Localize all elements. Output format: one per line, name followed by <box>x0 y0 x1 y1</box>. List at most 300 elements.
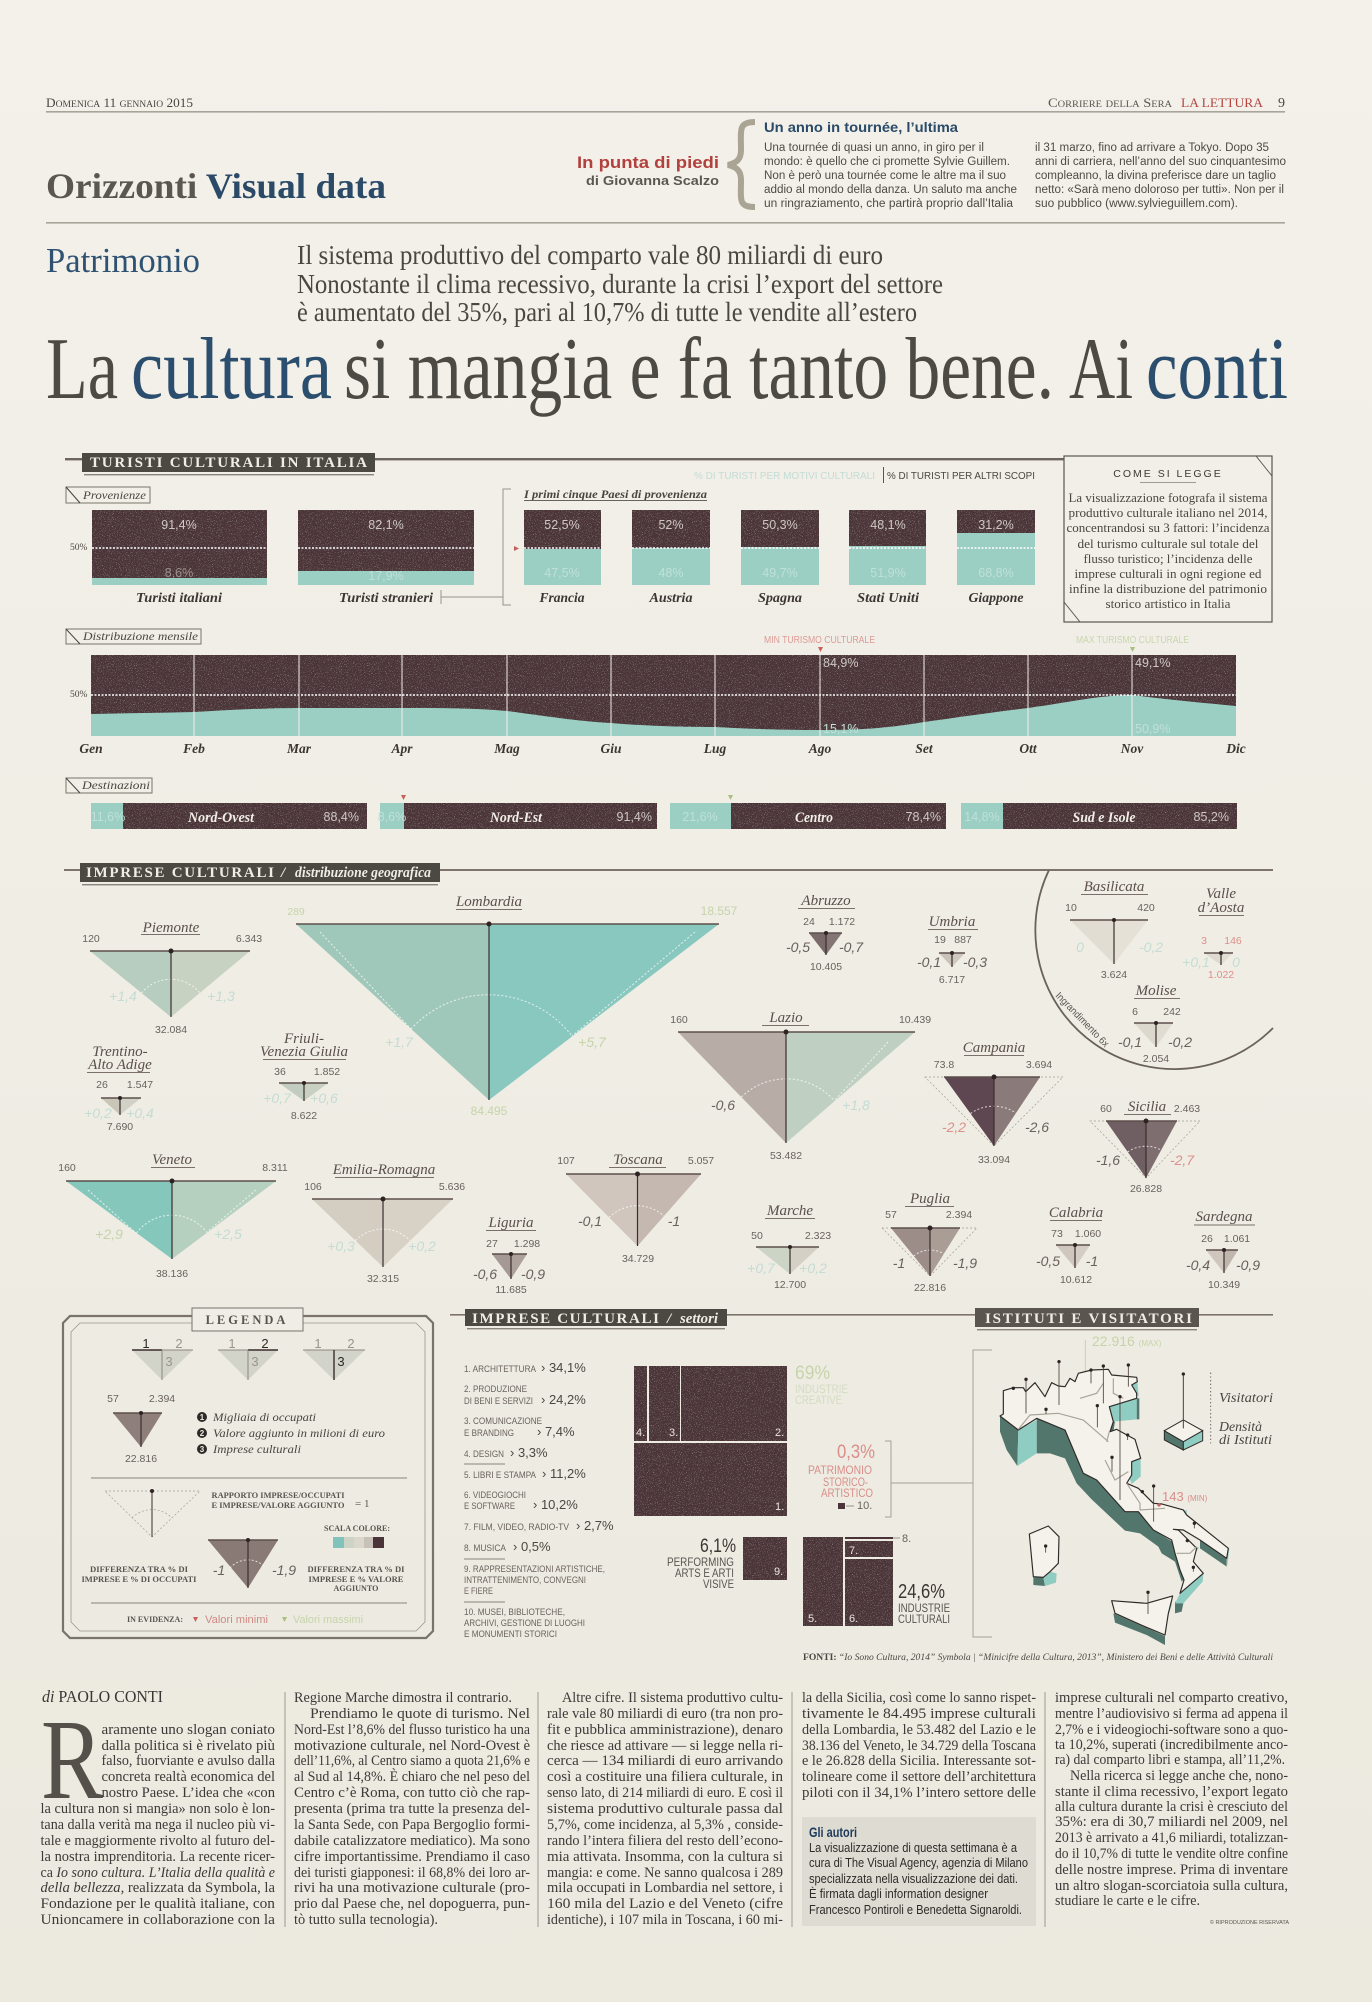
title box: LEGENDA <box>206 1313 288 1327</box>
region: Trentino-Alto Adige: 7.690 <box>107 1121 133 1133</box>
text column 3: sistema produttivo culturale passa dal <box>547 1801 783 1817</box>
callout: 6,1 percent: PERFORMING <box>667 1555 734 1569</box>
region: Valle d'Aosta <box>1182 886 1244 981</box>
marker: max destination <box>728 795 733 800</box>
text column 3: che riesce ad attivare — si legge nella ri- <box>547 1738 783 1754</box>
region: Sicilia: 60 <box>1100 1103 1112 1115</box>
marker: min destination <box>401 795 406 800</box>
region: Campania: 33.094 <box>978 1154 1010 1166</box>
mini triangle: valore 2 <box>218 1336 278 1380</box>
bar: Austria: 48% <box>658 566 684 580</box>
text column 4: tivamente le 84.495 imprese culturali <box>802 1706 1036 1722</box>
region: Veneto: Veneto <box>152 1152 192 1168</box>
text column 1: dalla politica si è rivelato più <box>102 1738 275 1754</box>
region: Veneto <box>58 1152 288 1280</box>
list of sectors: E SOFTWARE <box>464 1501 515 1512</box>
bar: Sud e Isole: 85,2% <box>1194 810 1229 824</box>
text column 3: mila occupati in Lombardia nel settore, i <box>547 1880 783 1896</box>
region: Molise: -0,2 <box>1168 1034 1192 1050</box>
article text: suo pubblico (www.sylvieguillem.com). <box>1035 198 1238 210</box>
text column 4: tolineare come il settore dell’architettura <box>802 1769 1036 1785</box>
text column 3: fit e pubblica amministrazione), denaro <box>547 1722 783 1738</box>
region: Veneto: +2,5 <box>214 1226 242 1242</box>
list of sectors: 1. ARCHITETTURA <box>464 1364 537 1375</box>
list of sectors: › 10,2% <box>533 1497 578 1512</box>
key: triangle values: Valore aggiunto in milioni di euro <box>213 1426 385 1440</box>
region: Basilicata: Basilicata <box>1084 879 1144 895</box>
explanation text: flusso turistico; l’incidenza delle <box>1084 552 1253 566</box>
list of sectors: 9. RAPPRESENTAZIONI ARTISTICHE, <box>464 1564 605 1575</box>
region: Sicilia: 2.463 <box>1174 1103 1200 1115</box>
text column 3: rando l’intera filiera del resto dell’econo- <box>547 1833 783 1849</box>
callout: 0,3 percent: 10. <box>857 1500 872 1512</box>
region: Valle d'Aosta: d’Aosta <box>1198 900 1244 916</box>
article text: anni di carriera, nell’anno del suo cinquantesimo <box>1035 156 1286 168</box>
text column 3: mangia: e come. Ne sanno qualcosa i 289 <box>547 1865 783 1881</box>
month labels: Lug <box>703 741 726 756</box>
box: gli autori: cura di The Visual Agency, agenzia di Milano <box>809 1855 1028 1870</box>
map: Sardinia <box>1029 1526 1059 1577</box>
callout: 0,3 percent <box>808 1442 875 1512</box>
area chart: monthly distribution: 84,9% <box>823 656 858 670</box>
map of Italy <box>1000 1340 1229 1645</box>
region: Sardegna: -0,9 <box>1236 1257 1260 1273</box>
region: Emilia-Romagna: 106 <box>304 1181 322 1193</box>
region: Toscana: 5.057 <box>688 1155 714 1167</box>
region: Sicilia: -1,6 <box>1096 1152 1120 1168</box>
callout: 24,6 percent: 24,6% <box>898 1581 945 1603</box>
text column 4: e le 26.828 della Sicilia. Interessante sot- <box>802 1753 1036 1769</box>
main title: conti <box>1146 321 1288 418</box>
region: Campania: Campania <box>963 1040 1025 1056</box>
region: Liguria: Liguria <box>487 1215 534 1231</box>
text column 5: ta 10,2%, superati (incredibilmente anco- <box>1055 1737 1288 1753</box>
connector to top five countries <box>441 489 511 605</box>
text column 5: 35%: era di 30,7 miliardi nel 2009, nel <box>1055 1814 1288 1830</box>
region: Abruzzo <box>786 893 864 973</box>
main title: Ai <box>1069 321 1133 418</box>
note: right difference: DIFFERENZA TRA % DI <box>308 1564 405 1574</box>
banner: turisti culturali in Italia <box>65 453 1065 475</box>
icon: key block <box>1164 1372 1211 1450</box>
banner: imprese culturali distribuzione geografica: distribuzione geografica <box>295 865 431 881</box>
example triangle: Puglia <box>107 1393 175 1465</box>
callout: 0,3 percent: ARTISTICO <box>821 1486 873 1500</box>
region: Calabria: -1 <box>1086 1253 1098 1269</box>
article text: mondo: è quello che ci promette Sylvie Guillem. <box>764 156 1010 168</box>
text column 2: Centro c’è Roma, con tutto ciò che rap- <box>294 1785 530 1801</box>
region: Puglia: -1 <box>893 1255 905 1271</box>
box: gli autori: specializzata nella visualizzazione dei dati. <box>809 1871 1018 1886</box>
region: Basilicata: 3.624 <box>1101 969 1127 981</box>
banner: istituti e visitatori <box>967 1308 1273 1330</box>
callout: 69 percent: CREATIVE <box>795 1393 842 1407</box>
text column 1: Unioncamere in collaborazione con la <box>40 1912 275 1928</box>
list of sectors: INTRATTENIMENTO, CONVEGNI <box>464 1575 586 1586</box>
callout: 69 percent: 69% <box>795 1363 830 1384</box>
subheading: Il sistema produttivo del comparto vale 80 miliardi di euro <box>297 240 883 270</box>
bar: Nord-Est: Nord-Est <box>489 810 543 826</box>
example triangle: differences: -1,9 <box>272 1562 296 1578</box>
panel: come si legge <box>1064 456 1272 622</box>
bar: Francia: 52,5% <box>544 518 580 532</box>
callout: 69 percent: INDUSTRIE <box>795 1382 848 1396</box>
panel: legenda <box>63 1308 433 1638</box>
region: Puglia: 2.394 <box>946 1209 972 1221</box>
region: Emilia-Romagna: 5.636 <box>439 1181 465 1193</box>
note: right difference: IMPRESE E % VALORE <box>308 1574 404 1584</box>
column dividers <box>285 1692 1045 1927</box>
box: gli autori: La visualizzazione di questa settimana è a <box>809 1840 1018 1855</box>
callout: max cultural tourism <box>1076 635 1189 652</box>
treemap: industrie culturali: 7. <box>849 1545 858 1557</box>
article text: addio al mondo della danza. Un saluto ma anche <box>764 184 1017 196</box>
region: Campania: -2,2 <box>942 1119 966 1135</box>
region: Abruzzo: Abruzzo <box>800 893 851 909</box>
region: Trentino-Alto Adige: Alto Adige <box>87 1057 152 1073</box>
region: Emilia-Romagna: +0,2 <box>408 1238 436 1254</box>
region: Abruzzo: -0,7 <box>839 939 864 955</box>
text column 2: presenta (prima tra tutte la presenza del- <box>294 1801 530 1817</box>
text column 3: 160 mila del Lazio e del Veneto (cifre <box>547 1896 783 1912</box>
region: Abruzzo: 1.172 <box>829 916 855 928</box>
mini triangle: valore 1: 3 <box>165 1354 173 1369</box>
bar: Nord-Ovest <box>91 803 367 829</box>
treemap: industrie creative: 2. <box>775 1427 784 1439</box>
text column 5: do il 10,7% di tutte le vendite oltre confine <box>1055 1846 1288 1862</box>
region: Piemonte: +1,4 <box>109 988 137 1004</box>
text column 2: al Sud al 14,8%. È chiaro che nel peso del <box>294 1768 530 1785</box>
text column 5: mentre l’audiovisivo si ferma ad appena il <box>1055 1706 1288 1722</box>
month labels: Dic <box>1225 741 1246 756</box>
region: Basilicata <box>1065 879 1163 981</box>
drop cap: R <box>41 1696 103 1823</box>
region: Toscana: 107 <box>557 1155 575 1167</box>
bar: turisti italiani: 91,4% <box>161 518 197 532</box>
area chart: monthly distribution: 15,1% <box>823 722 858 736</box>
callout: 143 min: 143 (MIN) <box>1162 1489 1208 1504</box>
text column 5: ra) dal comparto libri e stampa, all’11,2%. <box>1055 1752 1285 1768</box>
text column 1: della bellezza, realizzata da Symbola, la <box>40 1880 275 1896</box>
map key: visitatori e densita <box>1164 1372 1273 1450</box>
bar: Francia <box>524 510 601 606</box>
callout: 6,1 percent: 6,1% <box>700 1536 736 1557</box>
text column 2: rivi ha una motivazione culturale (pro- <box>294 1880 530 1896</box>
bar: Austria: 52% <box>658 518 684 532</box>
key: triangle values: 1 <box>200 1413 205 1422</box>
explanation text: infine la distribuzione del patrimonio <box>1069 582 1267 596</box>
text column 3: Altre cifre. Il sistema produttivo cultu- <box>562 1690 783 1706</box>
highlight key <box>127 1614 363 1626</box>
bar: Austria: Austria <box>648 591 692 606</box>
month labels: Mar <box>286 741 312 756</box>
ratio text <box>212 1490 369 1510</box>
text column 5: imprese culturali nel comparto creativo, <box>1055 1690 1288 1706</box>
treemap: industrie creative: 3. <box>669 1427 678 1439</box>
text column 5: 2,7% e i videogiochi-software sono a quo- <box>1055 1722 1288 1738</box>
note: right difference <box>308 1564 405 1593</box>
text column 3: cerca — 134 miliardi di euro arrivando <box>547 1753 783 1769</box>
region: Basilicata: -0,2 <box>1139 939 1163 955</box>
list of sectors: E MONUMENTI STORICI <box>464 1629 557 1640</box>
region: Umbria: Umbria <box>929 914 975 930</box>
region: Veneto: 38.136 <box>156 1268 188 1280</box>
region: Valle d'Aosta: Valle <box>1206 886 1236 902</box>
bar: Centro: Centro <box>795 810 833 826</box>
highlight key: Valori minimi <box>205 1614 268 1626</box>
text column 4 <box>802 1690 1036 1801</box>
page number: 9 <box>1278 96 1285 111</box>
label: provenienze: Provenienze <box>82 488 147 502</box>
newspaper name: Corriere della Sera <box>1048 96 1173 110</box>
article text: netto: «Sarà meno doloroso per tutti». Non per il <box>1035 184 1284 196</box>
region: Trentino-Alto Adige: 26 <box>96 1079 108 1091</box>
list of sectors: 6. VIDEOGIOCHI <box>464 1490 526 1501</box>
kicker: Patrimonio: Patrimonio <box>46 241 200 280</box>
region: Abruzzo: -0,5 <box>786 939 810 955</box>
mini triangle: valore 2: 1 <box>228 1336 236 1351</box>
region: Sardegna: Sardegna <box>1196 1209 1252 1225</box>
text column 5: 2013 è arrivato a 41,6 miliardi, totalizzan- <box>1055 1830 1288 1846</box>
region: Calabria: 73 <box>1051 1228 1063 1240</box>
bar: Spagna <box>741 510 819 606</box>
region: Sicilia <box>1090 1099 1200 1195</box>
region: Valle d'Aosta: 3 <box>1201 935 1207 947</box>
text column 2: Prendiamo le quote di turismo. Nel <box>310 1706 530 1722</box>
region: Lombardia: 84.495 <box>471 1104 508 1118</box>
bar: Francia: Francia <box>539 591 584 606</box>
region: Sicilia: Sicilia <box>1128 1099 1166 1115</box>
region: Sardegna: 1.061 <box>1224 1233 1250 1245</box>
region: Friuli-Venezia Giulia: Venezia Giulia <box>260 1044 348 1060</box>
subheading: è aumentato del 35%, pari al 10,7% di tutte le vendite all’estero <box>297 297 917 327</box>
list of sectors: › 34,1% <box>541 1360 586 1375</box>
map: dark side faces <box>1000 1391 1227 1645</box>
sources: FONTI: “Io Sono Cultura, 2014” Symbola | “Minicifre della Cultura, 2013”, Ministero dei Beni e delle Attività Culturali <box>803 1652 1273 1663</box>
bar: Austria <box>632 510 710 606</box>
region: Molise: 6 <box>1132 1006 1138 1018</box>
text column 2: Regione Marche dimostra il contrario. <box>294 1690 512 1706</box>
map key: visitatori e densita: di Istituti <box>1219 1433 1272 1448</box>
outline triangle: ratio <box>105 1489 200 1537</box>
region: Lombardia: 289 <box>287 906 305 918</box>
explanation text: produttivo culturale italiano nel 2014, <box>1068 506 1268 520</box>
article text: compleanno, la divina preferisce dare un taglio <box>1035 170 1276 182</box>
highlight key: Valori massimi <box>293 1614 363 1626</box>
list of sectors: DI BENI E SERVIZI <box>464 1396 533 1407</box>
region: Veneto: 160 <box>58 1162 76 1174</box>
key: triangle values: 3 <box>200 1445 205 1454</box>
region: Marche: +0,2 <box>799 1260 827 1276</box>
map: Sicily <box>1112 1596 1173 1635</box>
region: Trentino-Alto Adige: +0,4 <box>126 1105 154 1121</box>
text column 3: senso lato, di 214 miliardi di euro. E così il <box>547 1785 783 1801</box>
article text <box>764 142 1286 210</box>
region: Toscana: -1 <box>668 1213 680 1229</box>
panel: imprese culturali geografica <box>58 863 1273 1296</box>
region: Lombardia: Lombardia <box>455 894 522 910</box>
text column 5 <box>1055 1690 1288 1909</box>
list of sectors: ARCHIVI, GESTIONE DI LUOGHI <box>464 1618 585 1629</box>
list of sectors: E BRANDING <box>464 1428 514 1439</box>
text column 2: cifre importantissime. Prendiamo il caso <box>294 1849 530 1865</box>
list of sectors: 7. FILM, VIDEO, RADIO-TV <box>464 1522 570 1533</box>
region: Piemonte: Piemonte <box>142 920 200 936</box>
bar: Sud e Isole <box>961 803 1237 829</box>
region: Puglia: 22.816 <box>914 1282 946 1294</box>
bar: turisti italiani: 8,6% <box>165 566 193 580</box>
text column 1 <box>40 1722 275 1928</box>
month labels: Gen <box>79 741 103 756</box>
text column 2: motivazione culturale, nel Nord-Ovest è <box>294 1738 530 1754</box>
explanation text: concentrandosi su 3 fattori: l’incidenza <box>1066 521 1270 535</box>
list of sectors: › 2,7% <box>576 1518 614 1533</box>
mini triangle: valore 3: 2 <box>347 1336 355 1351</box>
bar: Stati Uniti: Stati Uniti <box>857 591 919 606</box>
region: Liguria <box>473 1215 545 1296</box>
month labels: Nov <box>1120 741 1144 756</box>
text column 3: identiche), i 107 mila in Toscana, i 60 mi- <box>547 1912 783 1928</box>
list of sectors: 10. MUSEI, BIBLIOTECHE, <box>464 1607 565 1618</box>
text column 2: dell’11,6%, al Centro siamo a quota 21,6% e <box>294 1753 530 1769</box>
region: Marche: Marche <box>766 1203 813 1219</box>
region: Molise: 242 <box>1163 1006 1181 1018</box>
text column 5: alla cultura durante la crisi è cresciuto del <box>1055 1799 1288 1815</box>
banner: imprese culturali distribuzione geografica: IMPRESE CULTURALI <box>86 865 274 881</box>
bar: turisti stranieri <box>298 510 474 606</box>
article text: il 31 marzo, fino ad arrivare a Tokyo. Dopo 35 <box>1035 142 1269 154</box>
region: Valle d'Aosta: +0,1 <box>1182 954 1210 970</box>
region: Veneto: 8.311 <box>262 1162 288 1174</box>
region: Puglia: Puglia <box>909 1191 950 1207</box>
month labels <box>79 741 1246 756</box>
article text: Non è però una tournée come le altre ma il suo <box>764 170 1006 182</box>
region: Calabria: -0,5 <box>1036 1253 1060 1269</box>
region: Friuli-Venezia Giulia: 1.852 <box>314 1066 340 1078</box>
main title: cultura <box>131 321 332 418</box>
region: Sardegna: -0,4 <box>1186 1257 1210 1273</box>
bar: Nord-Est: 91,4% <box>617 810 652 824</box>
region: Sicilia: -2,7 <box>1170 1152 1195 1168</box>
treemap: industrie creative: 1. <box>775 1501 784 1513</box>
region: Veneto: +2,9 <box>95 1226 123 1242</box>
region: Trentino-Alto Adige <box>84 1044 154 1133</box>
region: Sardegna: 10.349 <box>1208 1279 1240 1291</box>
region: Sicilia: 26.828 <box>1130 1183 1162 1195</box>
text column 4: della Lombardia, le 53.482 del Lazio e le <box>802 1722 1036 1738</box>
treemap: performing arts: 9. <box>774 1566 783 1578</box>
region: Friuli-Venezia Giulia <box>260 1031 348 1122</box>
bar: Giappone: 31,2% <box>978 518 1014 532</box>
bar: Nord-Ovest: Nord-Ovest <box>187 810 255 826</box>
region: Piemonte <box>82 920 262 1036</box>
region: Toscana: -0,1 <box>578 1213 602 1229</box>
list of sectors <box>464 1360 614 1640</box>
map: teal side faces <box>1007 1381 1229 1623</box>
magnifier circle: ingrandimento 6x: Ingrandimento 6x <box>1053 990 1111 1050</box>
box: gli autori: Gli autori <box>809 1824 857 1840</box>
region: Toscana <box>557 1152 714 1265</box>
magnifier circle: ingrandimento 6x <box>1035 870 1273 1069</box>
month labels: Giu <box>600 741 622 756</box>
text column 3: così a costituire una filiera culturale, in <box>547 1769 783 1785</box>
text column 1: la nostra imprenditoria. La recente ricer- <box>40 1849 275 1865</box>
treemap: performing arts <box>743 1537 787 1580</box>
month labels: Apr <box>390 741 413 756</box>
region: Umbria: 19 <box>934 934 946 946</box>
region: Liguria: 27 <box>486 1238 498 1250</box>
article text: Una tournée di quasi un anno, in giro per il <box>764 142 984 154</box>
region: Liguria: 1.298 <box>514 1238 540 1250</box>
main title: La <box>46 321 118 418</box>
map key: visitatori e densita: Densità <box>1218 1420 1262 1435</box>
list of sectors: › 11,2% <box>542 1466 586 1481</box>
region: Emilia-Romagna: +0,3 <box>327 1238 355 1254</box>
month labels: Ott <box>1019 741 1038 756</box>
bar: Spagna: 50,3% <box>762 518 798 532</box>
region: Marche: 2.323 <box>805 1230 831 1242</box>
panel: turisti culturali <box>65 453 1272 829</box>
callout: 24,6 percent: INDUSTRIE <box>898 1601 950 1615</box>
callout: 22.916 max: 22.916 (MAX) <box>1092 1333 1162 1349</box>
region: Lazio: +1,8 <box>842 1097 870 1113</box>
region: Umbria: 6.717 <box>939 974 965 986</box>
region: Friuli-Venezia Giulia: 36 <box>274 1066 286 1078</box>
list of sectors: 8. MUSICA <box>464 1543 507 1554</box>
heading: COME SI LEGGE <box>1113 468 1223 480</box>
region: Liguria: 11.685 <box>495 1284 527 1296</box>
text column 2: prio dal Paese che, nel dopoguerra, pun- <box>294 1896 530 1912</box>
bar: Centro <box>670 803 946 829</box>
bar: Spagna: Spagna <box>758 591 802 606</box>
mini triangle: valore 1: 2 <box>175 1336 183 1351</box>
text column 3 <box>547 1690 783 1928</box>
colour key <box>694 467 1035 483</box>
key: triangle values <box>197 1410 385 1456</box>
title box <box>192 1308 303 1331</box>
subheading <box>297 240 943 327</box>
region: Marche <box>747 1203 831 1291</box>
region: Molise: -0,1 <box>1118 1034 1142 1050</box>
bar: Sud e Isole: 14,8% <box>964 810 1000 824</box>
callout: 6,1 percent: ARTS E ARTI <box>675 1566 734 1580</box>
region: Umbria: 887 <box>954 934 972 946</box>
list of sectors: › 3,3% <box>510 1445 548 1460</box>
region: Piemonte: 32.084 <box>155 1024 187 1036</box>
region: Lazio <box>670 1010 931 1162</box>
callout: 69 percent <box>795 1363 848 1407</box>
region: Campania: 73.8 <box>934 1059 954 1071</box>
region: Friuli-Venezia Giulia: 8.622 <box>291 1110 317 1122</box>
region: Puglia: 57 <box>885 1209 897 1221</box>
region: Molise: 2.054 <box>1143 1053 1169 1065</box>
map key: visitatori e densita: Visitatori <box>1219 1391 1273 1406</box>
region: Calabria: Calabria <box>1049 1205 1103 1221</box>
region: Lombardia <box>287 894 738 1118</box>
text column 5: stante il clima recessivo, l’export legato <box>1055 1784 1288 1800</box>
region: Basilicata: 10 <box>1065 902 1077 914</box>
region: Lazio: 160 <box>670 1014 688 1026</box>
explanation text: del turismo culturale sul totale del <box>1078 537 1259 551</box>
map: max pin <box>1084 1340 1087 1453</box>
box: gli autori: Francesco Pontiroli e Benedetta Signaroldi. <box>809 1902 1022 1917</box>
bar: Nord-Est: 8,6% <box>378 810 406 824</box>
bar: Giappone: 68,8% <box>978 566 1014 580</box>
area chart: monthly distribution <box>70 655 1236 736</box>
explanation text: imprese culturali in ogni regione ed <box>1074 567 1262 581</box>
text column 1: nostro Paese. L’idea che «con <box>102 1785 275 1801</box>
list of sectors: › 0,5% <box>513 1539 551 1554</box>
